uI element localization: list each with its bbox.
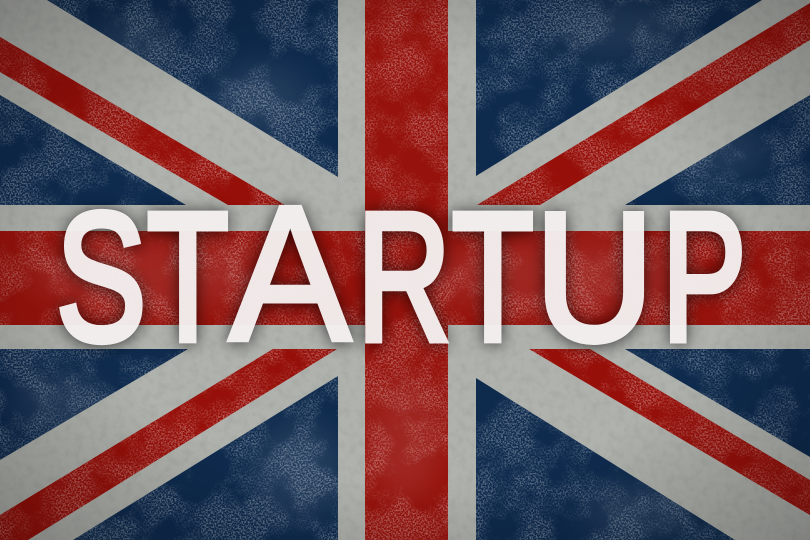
letter R: R (357, 174, 451, 379)
letter T: T (147, 174, 229, 379)
letter T: T (452, 174, 534, 379)
letter P: P (662, 176, 746, 380)
letter A: A (229, 166, 352, 381)
letter U: U (535, 174, 654, 379)
title: STARTUP (56, 166, 746, 381)
letter S: S (56, 175, 146, 380)
